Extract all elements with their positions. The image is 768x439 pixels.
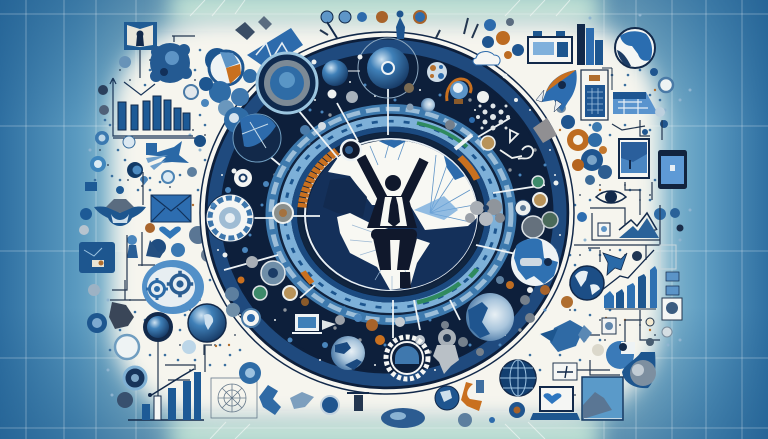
lower globe left (331, 336, 365, 370)
white ring node (210, 168, 269, 208)
icon: blue folder (79, 242, 115, 273)
mandala (206, 194, 254, 242)
lower left rim icons (188, 303, 260, 342)
bottom rim icons (239, 362, 525, 428)
middle dial ring (271, 109, 511, 320)
icon: box plane (553, 363, 577, 380)
icon: globe right (570, 266, 604, 300)
top globe node (358, 38, 418, 98)
top rim icons (320, 10, 524, 65)
icon: globe top right (615, 28, 655, 68)
icon: envelope (151, 195, 191, 222)
white robot figure (433, 329, 459, 374)
light bulb (447, 79, 471, 104)
bar chart with arrow (602, 250, 657, 309)
icon: open book (124, 22, 157, 50)
gears oval (142, 260, 204, 314)
continent: africa (337, 213, 430, 290)
cream backdrop (112, 20, 660, 420)
icon: winged emblem (94, 199, 146, 226)
bar chart top left (110, 78, 198, 138)
gear cluster orange and blue (556, 103, 612, 185)
sphere top left (322, 60, 360, 86)
side small icons (602, 107, 682, 346)
ring node left (273, 203, 293, 223)
land patches upper right (378, 140, 465, 180)
central globe (307, 140, 477, 290)
icon: building document (602, 68, 658, 114)
ring arc: green right (470, 269, 477, 277)
gear ring node (257, 53, 317, 113)
ring arc: green lower (417, 283, 460, 302)
small icon circles left (79, 56, 206, 235)
left column icons (79, 22, 257, 420)
ring arc: orange left (302, 151, 337, 207)
circuit lines right (570, 120, 662, 375)
icon: calculator (581, 70, 608, 120)
icon: monitor (292, 314, 336, 333)
right column icons (528, 24, 687, 420)
icon: tablet (658, 150, 687, 189)
ring arc: orange upper right (460, 157, 477, 179)
dark rays on africa (350, 225, 410, 290)
wire globe (500, 360, 536, 396)
main circular diagram (188, 10, 577, 428)
textured ring segment (533, 118, 557, 143)
speckled sphere (427, 62, 447, 82)
left globes (87, 284, 196, 408)
spokes and arrows (208, 68, 545, 338)
sphere left (233, 114, 281, 162)
icon: laptop with heart (530, 387, 580, 420)
icon: rocket (536, 70, 577, 112)
bottom gear (386, 337, 428, 379)
ring arc: green upper (417, 123, 467, 147)
small dots inside dark disc (218, 82, 560, 370)
icon: skyscrapers (577, 24, 603, 65)
chevron truss top (235, 16, 303, 69)
icon: badge bottom right (592, 341, 656, 388)
gray gear cluster (465, 199, 505, 226)
inner lower dots (288, 276, 550, 356)
icon: picture landscape (582, 377, 623, 420)
ocean (307, 140, 477, 290)
lower left nodes (222, 247, 309, 306)
circuit lines left (110, 36, 212, 405)
blue cluster top left (199, 48, 257, 133)
sun rays (370, 138, 474, 222)
icon: heart (159, 227, 181, 239)
compass chart (211, 378, 257, 418)
icon: paper plane (146, 141, 189, 170)
icon: picture frame (619, 139, 649, 178)
speckle dots (84, 15, 690, 395)
ring arc: orange lower left (303, 272, 312, 283)
pictogram figure (361, 157, 424, 288)
crystal flake (476, 104, 510, 130)
blue badge cluster (540, 296, 592, 352)
growth bar chart (128, 369, 204, 420)
continent: europe (323, 177, 367, 217)
figure and plant cluster (127, 226, 215, 262)
icon: blue gear blob (150, 43, 192, 83)
right white blue sphere (511, 238, 559, 286)
outer rings (200, 32, 574, 394)
right upper white glyphs (481, 130, 558, 238)
icon: browser panel (528, 31, 572, 63)
icon: paper plane right (603, 253, 627, 275)
upper land with white rays (328, 140, 480, 230)
icon: eye (577, 68, 684, 232)
white dots upper (300, 54, 518, 135)
ray glow (414, 196, 458, 220)
mountain line chart (592, 213, 660, 240)
lower globe right (466, 293, 514, 341)
central ring node (341, 140, 361, 160)
